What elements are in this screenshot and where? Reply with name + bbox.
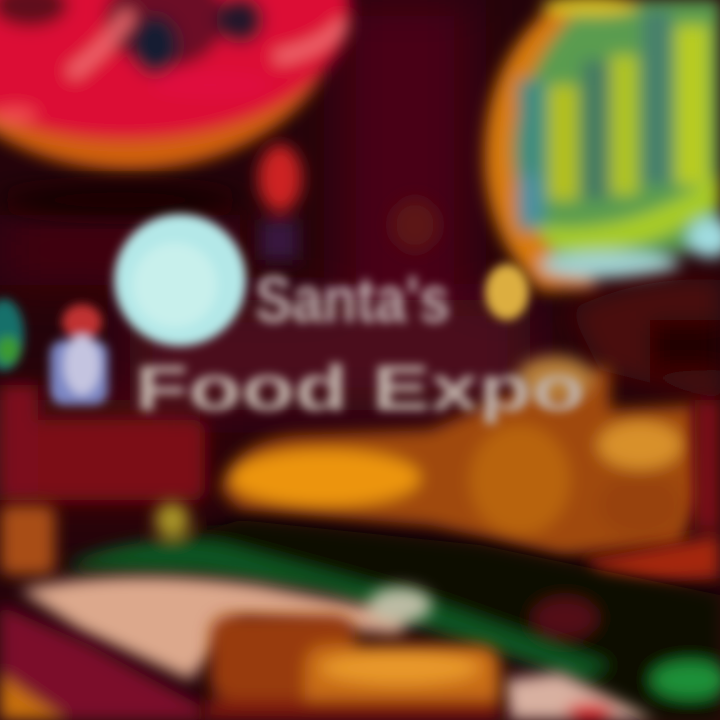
left orange block — [0, 505, 55, 575]
dark floor band with green felt — [60, 502, 720, 720]
orange foreground cushions — [205, 615, 500, 720]
dark band under roulette — [0, 184, 240, 216]
yellow bulb — [485, 264, 529, 320]
logo disc — [114, 214, 246, 346]
red couch left — [0, 385, 205, 500]
red lamp figure — [258, 144, 439, 260]
left figures — [0, 299, 108, 405]
right dark panel — [570, 279, 720, 400]
slot machine top-right — [485, 0, 720, 290]
title text — [135, 262, 585, 424]
title text: Food Expo — [135, 352, 585, 424]
right red strip — [585, 400, 720, 588]
orange couch — [220, 356, 700, 555]
roulette table top-left — [0, 0, 350, 170]
cream table foreground — [20, 576, 655, 720]
crimson foreground edge — [0, 605, 205, 720]
title text: Santa's — [255, 262, 450, 336]
